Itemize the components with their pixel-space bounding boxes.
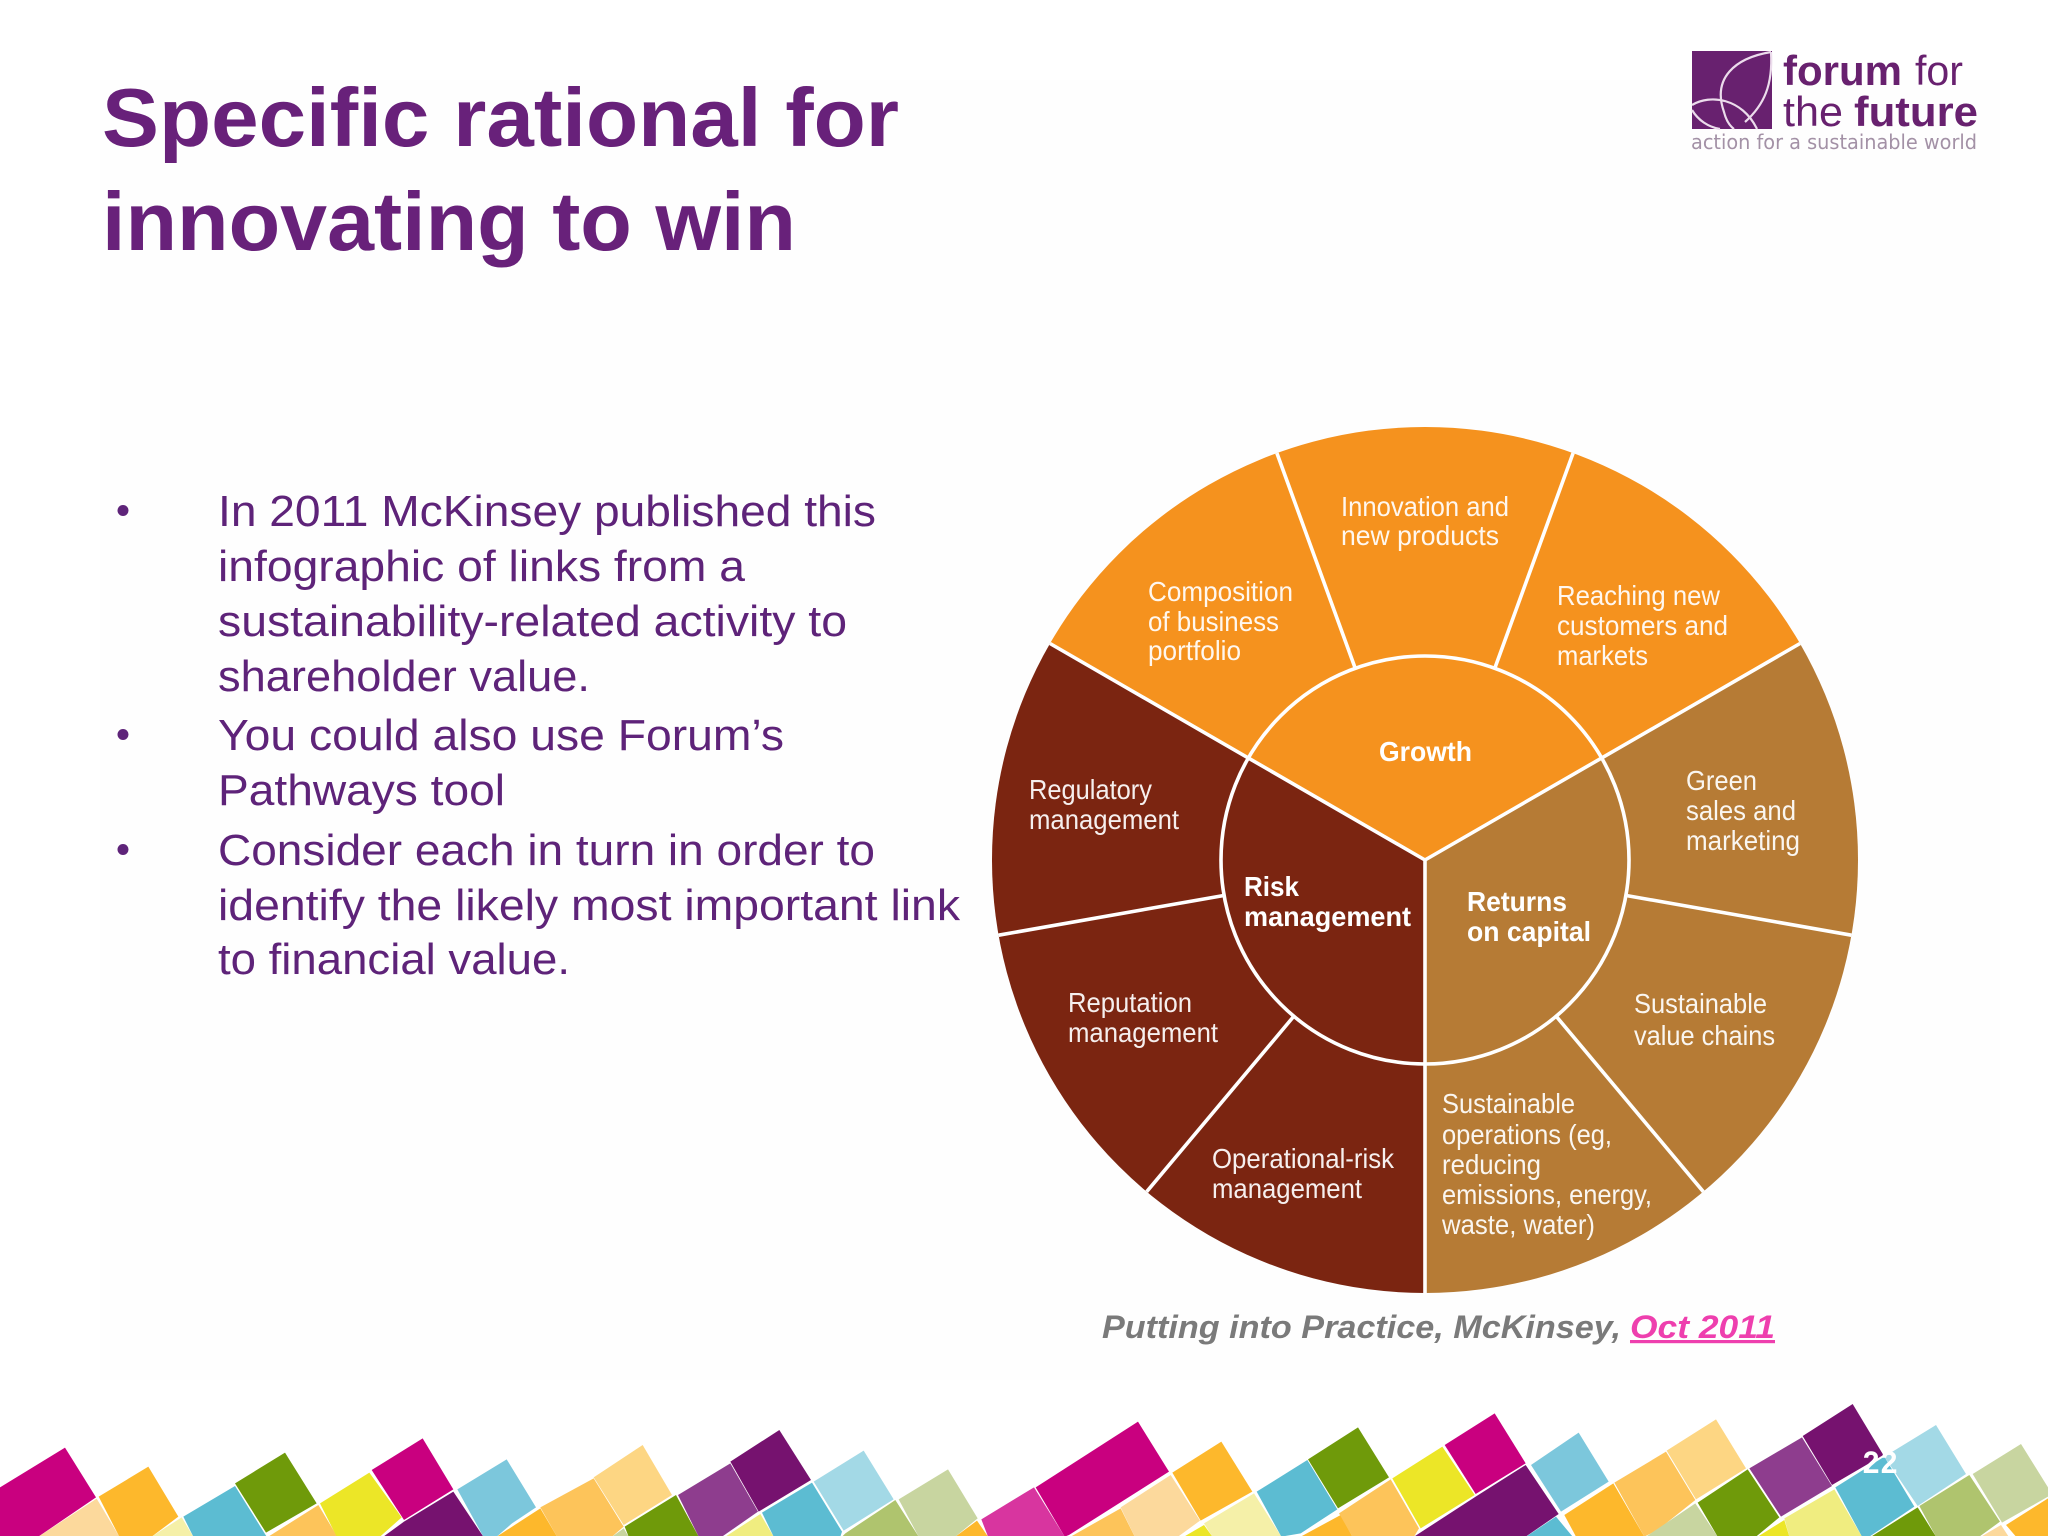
wheel labels: returns on capital: sales and: [1686, 795, 1796, 826]
wheel labels: risk management: Risk: [1244, 871, 1300, 902]
bullet list: Pathways tool: [218, 766, 505, 815]
wheel labels: growth: new products: [1341, 520, 1499, 551]
wheel labels: growth: portfolio: [1148, 635, 1241, 666]
wheel labels: growth: Growth: [1379, 736, 1472, 767]
wheel labels: returns on capital: Sustainable: [1442, 1088, 1575, 1119]
wheel labels: returns on capital: emissions, energy,: [1442, 1179, 1652, 1210]
segment: growth: [1050, 427, 1800, 860]
source caption: Putting into Practice, McKinsey,: [1102, 1309, 1621, 1345]
bullet list: In 2011 McKinsey published this: [218, 487, 876, 536]
bullet list: sustainability-related activity to: [218, 597, 847, 646]
segment: returns on capital: [1425, 644, 1858, 1293]
logo: forum for the future: action for a sustainable world: [1691, 130, 1977, 154]
wheel labels: risk management: Operational-risk: [1212, 1143, 1394, 1174]
wheel labels: returns on capital: value chains: [1634, 1020, 1775, 1051]
wheel labels: risk management: management: [1029, 804, 1179, 835]
wheel labels: risk management: management: [1244, 901, 1411, 932]
decorative diamond strip: [0, 1404, 2048, 1536]
bullet list: shareholder value.: [218, 652, 590, 701]
bullet list: You could also use Forum’s: [218, 711, 784, 760]
logo: forum for the future: [1691, 47, 1978, 154]
logo: forum for the future: future: [1854, 88, 1978, 135]
source caption: Oct 2011: [1630, 1309, 1775, 1345]
wheel labels: growth: Reaching new: [1557, 580, 1720, 611]
logo: forum for the future: for: [1915, 47, 1963, 94]
bullet list: infographic of links from a: [218, 542, 746, 591]
wheel labels: returns on capital: Green: [1686, 765, 1757, 796]
wheel labels: returns on capital: Returns: [1467, 886, 1567, 917]
wheel labels: growth: Innovation and: [1341, 491, 1509, 522]
segment: risk management: [992, 644, 1425, 1293]
logo: forum for the future: forum: [1783, 47, 1902, 94]
page number: 22: [1862, 1446, 1898, 1483]
wheel labels: returns on capital: marketing: [1686, 825, 1800, 856]
bullet list: Consider each in turn in order to: [218, 826, 875, 875]
bullet list: [118, 487, 961, 984]
wheel labels: returns on capital: Sustainable: [1634, 988, 1767, 1019]
wheel labels: growth: markets: [1557, 640, 1648, 671]
title: Specific rational for: [102, 71, 899, 164]
wheel labels: risk management: management: [1068, 1017, 1218, 1048]
wheel labels: returns on capital: on capital: [1467, 916, 1591, 947]
wheel labels: growth: [1148, 491, 1728, 767]
wheel labels: returns on capital: reducing: [1442, 1149, 1541, 1180]
wheel labels: risk management: management: [1212, 1173, 1362, 1204]
title: innovating to win: [102, 175, 796, 268]
wheel labels: risk management: [1029, 774, 1411, 1204]
wheel labels: risk management: Regulatory: [1029, 774, 1152, 805]
logo: forum for the future: the: [1783, 88, 1843, 135]
title: [102, 71, 899, 268]
wheel labels: returns on capital: waste, water): [1441, 1209, 1595, 1240]
wheel labels: returns on capital: operations (eg,: [1442, 1119, 1612, 1150]
wheel labels: risk management: Reputation: [1068, 987, 1192, 1018]
wheel labels: growth: of business: [1148, 606, 1279, 637]
wheel labels: growth: customers and: [1557, 610, 1728, 641]
bullet list: identify the likely most important link: [218, 881, 961, 930]
wheel chart: [992, 427, 1858, 1295]
wheel labels: returns on capital: [1441, 765, 1800, 1240]
wheel labels: growth: Composition: [1148, 576, 1293, 607]
bullet list: to financial value.: [218, 935, 570, 984]
